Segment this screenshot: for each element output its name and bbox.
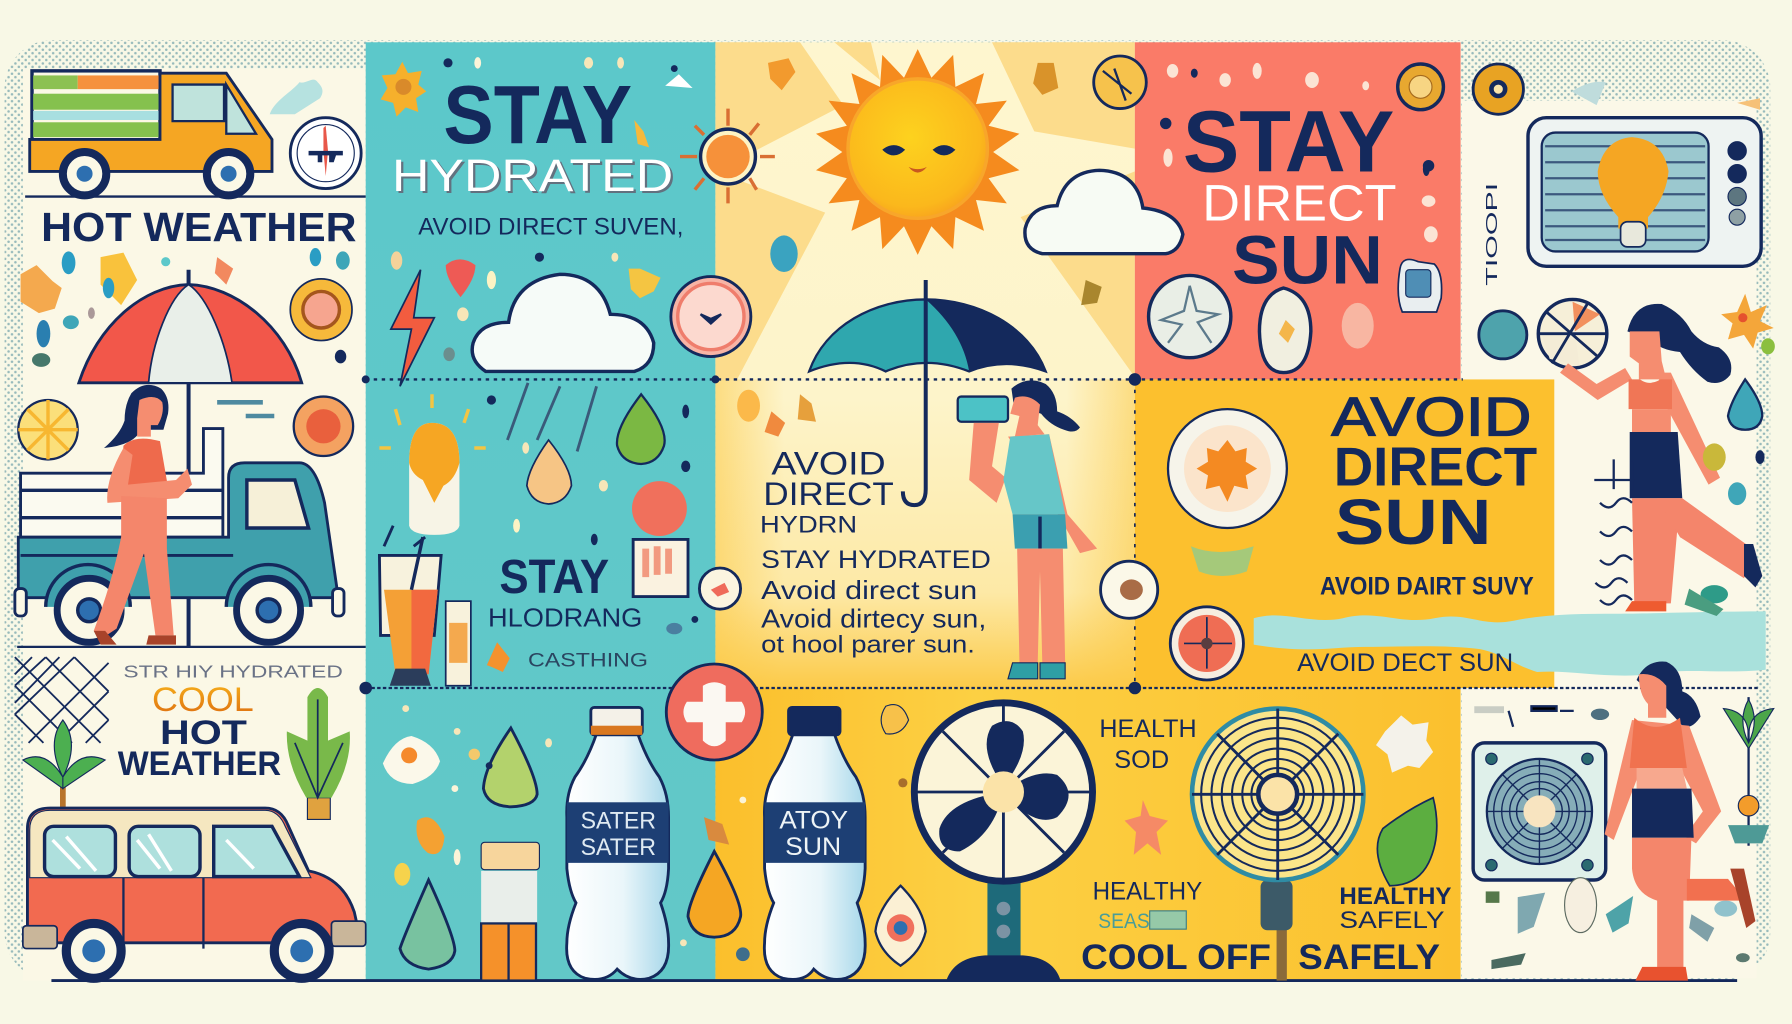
confetti: bottom teal and yellow	[394, 705, 909, 961]
icons: centre upper small	[768, 56, 1146, 305]
illustration: water bottle one: SATER	[581, 808, 656, 835]
illustration: beach umbrella	[79, 270, 302, 647]
icons: left column circles	[18, 279, 353, 459]
heading: hydrated: HYDRATED	[394, 152, 675, 203]
panel: yellow avoid direct sun	[1135, 379, 1554, 688]
text: health sod: HEALTH	[1099, 715, 1197, 743]
illustration: water bottle two	[764, 707, 865, 979]
icon: juice glass	[379, 526, 441, 686]
illustration: round grille fan	[1192, 709, 1363, 981]
illustration: blue truck	[15, 429, 344, 642]
illustration: woman beside fan	[1605, 661, 1755, 981]
illustration: wall fan unit	[1473, 743, 1606, 880]
icon: white blob flower	[383, 736, 445, 854]
icon: jar with fruit	[632, 481, 688, 597]
text block: avoid direct hydration: STAY HYDRATED	[761, 546, 991, 574]
heading: cool off safely: SAFELY	[1298, 937, 1440, 977]
icon: star and leaf and splat	[875, 715, 1437, 966]
icon: compass	[290, 118, 361, 189]
cloud smear	[270, 80, 322, 114]
text: health sod	[1099, 715, 1197, 774]
icon: cloud teal panel	[472, 274, 654, 371]
icons: coral panel	[1149, 64, 1443, 373]
icon: small bottle	[446, 601, 471, 686]
illustration: water bottle one: SATER	[581, 834, 656, 861]
panel: left cream column	[23, 69, 366, 981]
icons: centre lower small	[699, 390, 1158, 618]
panel: centre sun area	[715, 42, 1135, 689]
heading: avoid direct sun yellow: SUN	[1335, 486, 1491, 558]
text block: avoid direct hydration	[760, 445, 991, 659]
vertical text: TIOOPI	[1484, 183, 1501, 286]
illustration: water bottle one	[567, 707, 669, 979]
text: healthy safely right: HEALTHY	[1339, 883, 1451, 910]
subheading: avoid dairt suvy: AVOID DAIRT SUVY	[1320, 572, 1534, 600]
icon: small gold sun	[381, 62, 426, 117]
heading: avoid direct sun yellow	[1331, 385, 1537, 558]
illustration: fence net	[15, 657, 109, 743]
panel: coral	[1135, 42, 1461, 379]
heading: cool off safely: COOL OFF	[1081, 937, 1271, 977]
icon: red drop	[446, 259, 475, 297]
panel: yellow lower band	[715, 688, 1461, 981]
text block: avoid direct hydration: Avoid direct sun	[761, 575, 977, 605]
illustration: red van	[23, 808, 366, 978]
icon: plant	[23, 720, 105, 807]
panel: teal column	[366, 42, 715, 981]
illustration: yellow truck	[30, 71, 272, 195]
icon: cloud centre	[1025, 170, 1183, 254]
heading: stay teal: STAY	[443, 70, 632, 161]
illustration: air conditioner with bulb	[1528, 118, 1761, 266]
confetti: teal middle	[487, 395, 698, 634]
text block: avoid direct hydration: DIRECT	[763, 476, 894, 512]
icon: green bowl	[1191, 546, 1254, 576]
heading: hydrated: HYDRATED	[392, 150, 673, 201]
icon: teal drop lower	[400, 880, 455, 969]
icon: gold ring	[1473, 64, 1523, 114]
icon: orange jar	[481, 842, 539, 981]
icon: orange sun with rays	[680, 109, 775, 203]
small heading: stay hydrated: STR HIY HYDRATED	[123, 662, 343, 682]
icon: green drop lower	[483, 728, 537, 807]
heading: sun coral: SUN	[1232, 221, 1383, 298]
icon: orange star splat	[487, 642, 510, 672]
subheading: avoid dect sun: AVOID DECT SUN	[1297, 649, 1513, 677]
text: healthy seas left	[1093, 877, 1203, 933]
icon: orange burst circle	[1168, 409, 1287, 528]
illustration: teal and navy umbrella	[809, 280, 1046, 505]
heading: hot weather: HOT WEATHER	[41, 204, 357, 250]
text block: avoid direct hydration: HYDRN	[760, 512, 857, 539]
confetti: teal upper	[391, 57, 693, 361]
icon: medical cross	[666, 664, 762, 760]
illustration: woman drinking water	[958, 380, 1097, 679]
confetti: right column	[1571, 82, 1765, 616]
text: healthy safely right: SAFELY	[1339, 907, 1445, 934]
icon: ice pop bulb	[379, 394, 486, 535]
icon: gauge circle	[1170, 607, 1243, 680]
water wave band	[1254, 611, 1766, 676]
illustration: rain streaks	[507, 383, 597, 451]
panel: right cream column	[1462, 101, 1757, 978]
text block: avoid direct hydration: AVOID	[771, 445, 886, 481]
heading: hot: HOT	[160, 714, 247, 752]
heading: cool off safely	[1081, 937, 1440, 977]
icon: green drop	[617, 394, 665, 464]
heading: weather: WEATHER	[118, 745, 281, 783]
illustration: woman under umbrella	[94, 385, 192, 645]
heading: avoid direct sun yellow: DIRECT	[1334, 436, 1537, 498]
confetti: left column upper	[21, 248, 350, 418]
illustration: water bottle two: ATOY	[779, 807, 848, 835]
heading: cool: COOL	[152, 681, 254, 719]
text: health sod: SOD	[1114, 746, 1169, 774]
illustration: water bottle two: SUN	[785, 833, 841, 861]
illustration: sun with face	[816, 49, 1019, 255]
illustration: woman with ball	[1560, 304, 1762, 611]
text: healthy safely right	[1339, 883, 1451, 934]
section divider lines	[17, 197, 1760, 981]
confetti: coral	[1160, 63, 1438, 242]
heading: stay coral: STAY	[1183, 93, 1394, 190]
icon: plant right	[1723, 697, 1774, 846]
illustration: black desk fan	[914, 703, 1093, 981]
heading: direct white: DIRECT	[1202, 174, 1397, 232]
text block: avoid direct hydration: Avoid dirtecy sun,	[761, 603, 986, 633]
heading: stay lower teal: STAY	[499, 551, 609, 604]
icons: right column	[1479, 294, 1775, 430]
text: healthy seas left: SEAS	[1098, 908, 1150, 933]
heading: avoid direct sun yellow: AVOID	[1331, 385, 1531, 447]
text: healthy seas left: HEALTHY	[1093, 877, 1203, 905]
icon: orange drop	[527, 440, 571, 504]
confetti: right bottom	[1474, 706, 1750, 969]
subheading: casthing: CASTHING	[528, 649, 648, 671]
subheading: hlodrang: HLODRANG	[488, 602, 642, 632]
text block: avoid direct hydration: ot hool parer sun.	[761, 632, 975, 659]
icon: orange drop lower	[688, 851, 741, 937]
icon: water ripples	[1594, 459, 1634, 605]
icon: pink check circle	[671, 277, 751, 357]
subheading: avoid direct suven: AVOID DIRECT SUVEN,	[418, 213, 683, 240]
icon: cactus plant	[287, 688, 350, 819]
icon: lightning bolt	[391, 270, 434, 386]
